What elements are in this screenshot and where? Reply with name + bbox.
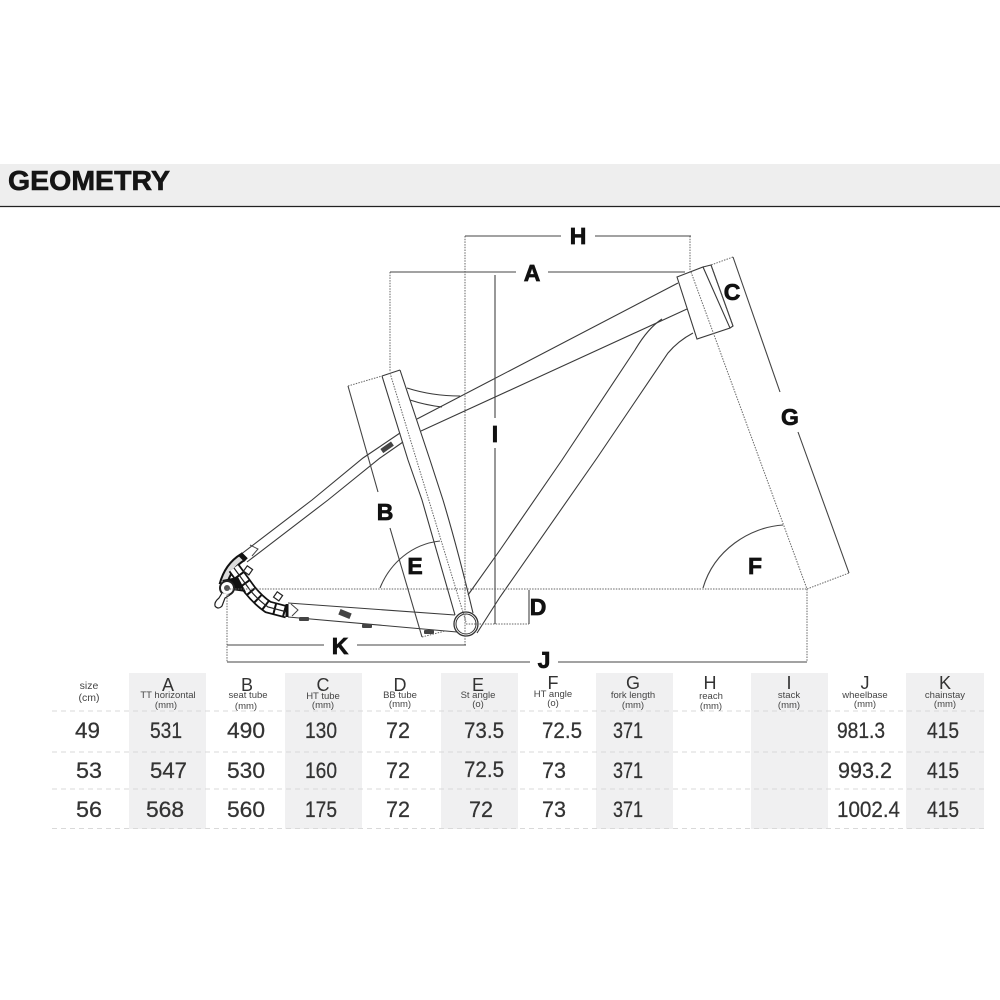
row: size 56: 73 [542, 797, 566, 822]
table header row: (o) [547, 698, 559, 709]
table header row: H [704, 673, 716, 693]
row: size 49: 73.5 [464, 718, 504, 743]
table header row: HT tube [306, 691, 340, 702]
dimension C [711, 265, 740, 326]
row: size 56: 56 [76, 797, 102, 822]
dimension F: F [748, 553, 762, 579]
table header row: St angle [461, 690, 495, 701]
row: size 49: 371 [613, 718, 643, 743]
table header row: (o) [472, 699, 484, 710]
table header row: (mm) [854, 699, 876, 710]
row: size 56: 415 [927, 797, 959, 822]
seat tube brace [407, 388, 460, 407]
row: size 53: 53 [76, 758, 102, 783]
bottom bracket [454, 612, 478, 636]
row: size 53: 73 [542, 758, 566, 783]
table header row: F [548, 673, 558, 693]
row: size 56: 1002.4 [837, 797, 900, 822]
dimension H: H [570, 223, 586, 249]
table header row: (mm) [312, 700, 334, 711]
dimension J: J [538, 647, 550, 673]
top tube [417, 283, 687, 431]
table header row: J [860, 673, 870, 693]
head tube [677, 265, 733, 339]
chain stay [288, 603, 457, 632]
row: size 53: 72 [386, 758, 410, 783]
row: size 53: 371 [613, 758, 643, 783]
row: size 49: 72 [386, 718, 410, 743]
dimension C: C [724, 279, 740, 305]
table header row: chainstay [925, 690, 965, 701]
table header row: (mm) [934, 699, 956, 710]
table header row: (mm) [778, 700, 800, 711]
row: size 56: 568 [146, 797, 184, 822]
table header row [78, 673, 965, 712]
heading: GEOMETRY: GEOMETRY [8, 165, 170, 196]
row: size 53: 72.5 [464, 757, 504, 782]
row: size 49: 49 [75, 718, 100, 743]
table header row: C [316, 675, 330, 695]
table header row: B [241, 675, 253, 695]
row: size 53: 160 [305, 758, 337, 783]
seat stay [240, 433, 403, 562]
dimension E [380, 541, 440, 588]
table header row: E [472, 675, 484, 695]
row: size 56 [76, 797, 959, 822]
table header row: (mm) [389, 699, 411, 710]
row: size 56: 371 [613, 797, 643, 822]
table header row: BB tube [383, 690, 417, 701]
title band [0, 164, 1000, 206]
table header row: size [80, 680, 98, 692]
table header row: stack [778, 690, 800, 701]
row: size 49: 415 [927, 718, 959, 743]
bosses and small marks [299, 442, 434, 634]
shaded columns [129, 673, 984, 829]
dimension G [733, 257, 849, 573]
seat tube [382, 370, 473, 615]
row: size 53: 547 [150, 758, 187, 783]
row: size 56: 560 [227, 797, 265, 822]
table header row: D [394, 675, 406, 695]
dimension B: B [377, 499, 393, 525]
row: size 49: 490 [227, 718, 265, 743]
dimension B [348, 386, 422, 637]
table header row: (mm) [700, 701, 722, 712]
row: size 49: 72.5 [542, 718, 582, 743]
rear dropout [215, 545, 298, 617]
row: size 49: 130 [305, 718, 337, 743]
table header row: (mm) [155, 700, 177, 711]
row: size 49 [75, 718, 959, 743]
dimension K: K [332, 633, 349, 659]
dimension E: E [407, 553, 423, 579]
table header row: wheelbase [841, 690, 888, 701]
table header row: I [786, 673, 792, 693]
row: size 53: 993.2 [838, 758, 892, 783]
table header row: K [939, 673, 951, 693]
bike frame drawing [215, 265, 733, 636]
table header row: G [626, 673, 640, 693]
table header row: (mm) [235, 701, 257, 712]
dimension G: G [781, 404, 799, 430]
row: size 49: 981.3 [837, 718, 885, 743]
geometry table [52, 673, 984, 829]
dimension A: A [524, 260, 540, 286]
dimension D: D [530, 594, 546, 620]
table header row: fork length [611, 690, 655, 701]
row: size 49: 531 [150, 718, 182, 743]
row: size 56: 72 [386, 797, 410, 822]
table header row: (mm) [622, 700, 644, 711]
table header row: HT angle [534, 689, 572, 700]
row: size 53: 530 [227, 758, 265, 783]
row: size 53: 415 [927, 758, 959, 783]
dimension lines [227, 223, 849, 673]
row: size 56: 175 [305, 797, 337, 822]
table header row: TT horizontal [140, 690, 196, 701]
dimension I: I [492, 421, 498, 447]
row: size 53 [76, 757, 959, 783]
table header row: reach [699, 691, 723, 702]
table header row: seat tube [228, 690, 268, 701]
row: size 56: 72 [469, 797, 493, 822]
table header row: (cm) [78, 692, 100, 704]
table header row: A [162, 675, 174, 695]
down tube [468, 319, 693, 633]
dimension F [703, 525, 783, 588]
